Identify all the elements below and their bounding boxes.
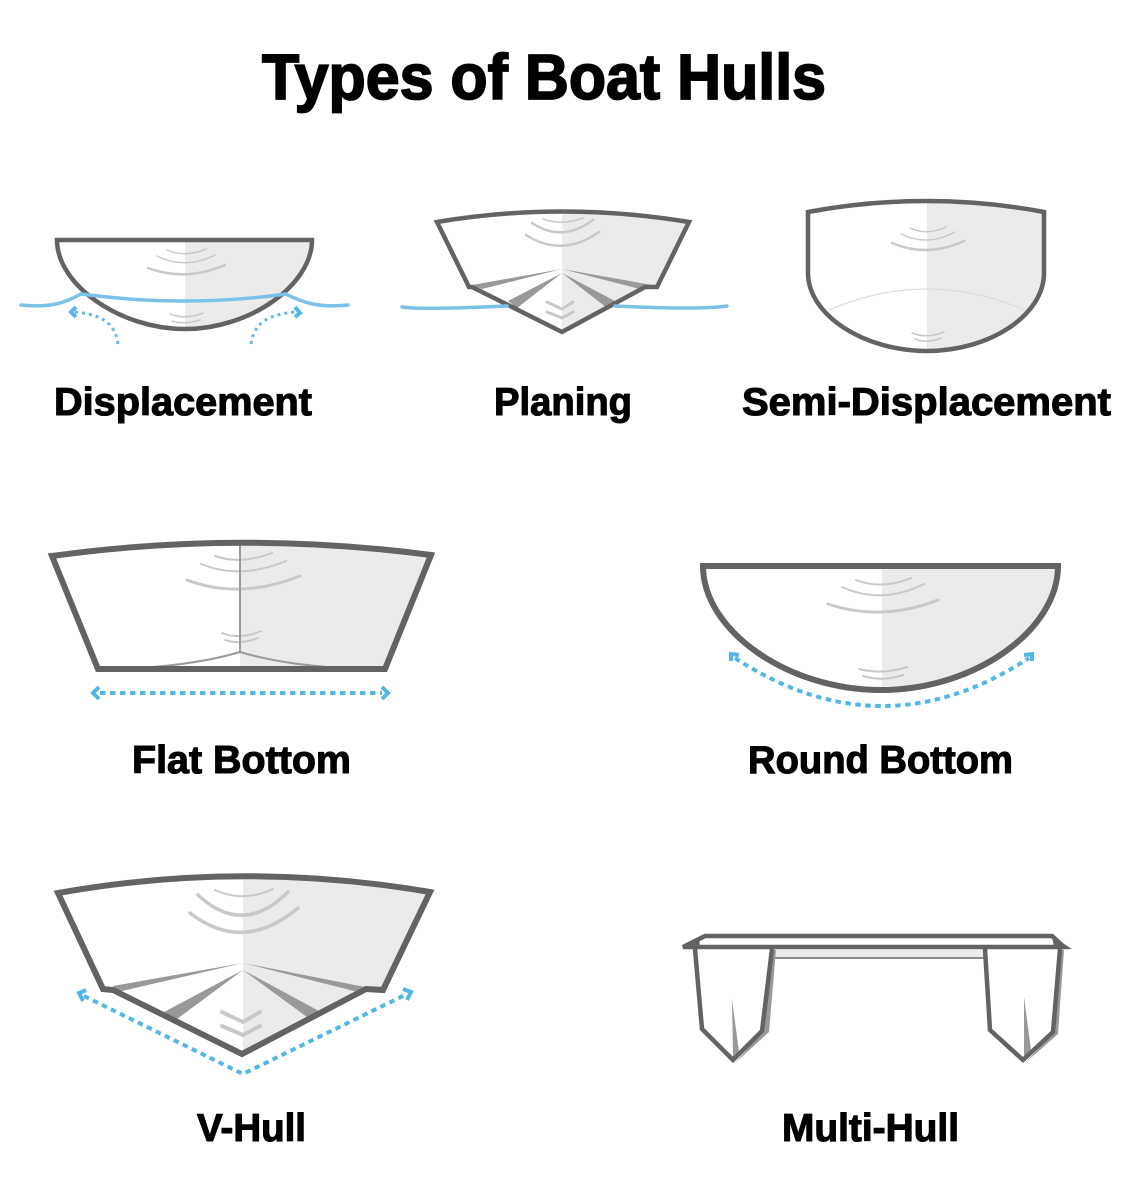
- label: round bottom: Round Bottom: [748, 739, 1013, 782]
- label: semi-displacement: Semi-Displacement: [742, 381, 1111, 424]
- semi-displacement hull outline: [808, 201, 1044, 351]
- flat bottom width arrow: [93, 687, 388, 699]
- semi-displacement ripples: [829, 227, 1025, 341]
- flat bottom ripples: [187, 553, 300, 642]
- planing waterline: [402, 306, 727, 308]
- multi-hull right hull: [985, 949, 1060, 1060]
- panel: planing hull: [402, 212, 727, 424]
- round bottom ripples: [828, 578, 938, 679]
- displacement waterline: [21, 294, 348, 306]
- panel: multi-hull: [683, 936, 1072, 1150]
- label: multi-hull: Multi-Hull: [782, 1107, 959, 1150]
- displacement flow arrows: [71, 307, 300, 344]
- multi-hull bridge deck: [772, 950, 985, 957]
- semi-displacement shaded half: [927, 203, 1042, 349]
- panel: semi-displacement hull: [742, 201, 1111, 424]
- displacement shaded half: [185, 242, 310, 327]
- v-hull deadrise arrows: [79, 989, 411, 1074]
- v-hull ripples: [190, 889, 298, 1035]
- panel: round bottom hull: [703, 566, 1058, 782]
- round bottom hull outline: [703, 566, 1058, 690]
- multi-hull deck corners: [683, 936, 1072, 949]
- v-hull strakes: [113, 963, 370, 1019]
- round bottom shaded half: [882, 569, 1055, 687]
- displacement ripples: [148, 249, 225, 323]
- planing strakes: [472, 269, 652, 308]
- label: displacement: Displacement: [54, 381, 312, 424]
- label: planing: Planing: [494, 381, 632, 424]
- title: Types of Boat Hulls: [262, 41, 826, 113]
- planing ripples: [526, 218, 599, 318]
- multi-hull deck: [683, 936, 1064, 947]
- panel: flat bottom hull: [52, 543, 431, 782]
- displacement hull outline: [57, 240, 312, 329]
- multi-hull shadows and spikes: [732, 950, 1064, 1063]
- flat bottom hull outline: [52, 543, 431, 669]
- multi-hull left hull: [695, 949, 772, 1060]
- label: flat bottom: Flat Bottom: [132, 739, 351, 782]
- panel: v-hull: [58, 876, 430, 1150]
- panel: displacement hull: [21, 240, 348, 424]
- flat bottom keel lines: [140, 543, 340, 668]
- v-hull outline: [58, 876, 430, 1054]
- planing hull outline: [437, 212, 689, 332]
- planing shaded half: [562, 214, 686, 330]
- label: v-hull: V-Hull: [197, 1107, 306, 1150]
- flat bottom shaded half: [240, 546, 426, 666]
- round bottom curve arrow: [731, 654, 1032, 706]
- multi-hull bridge underside: [772, 957, 985, 959]
- v-hull shaded half: [243, 879, 426, 1050]
